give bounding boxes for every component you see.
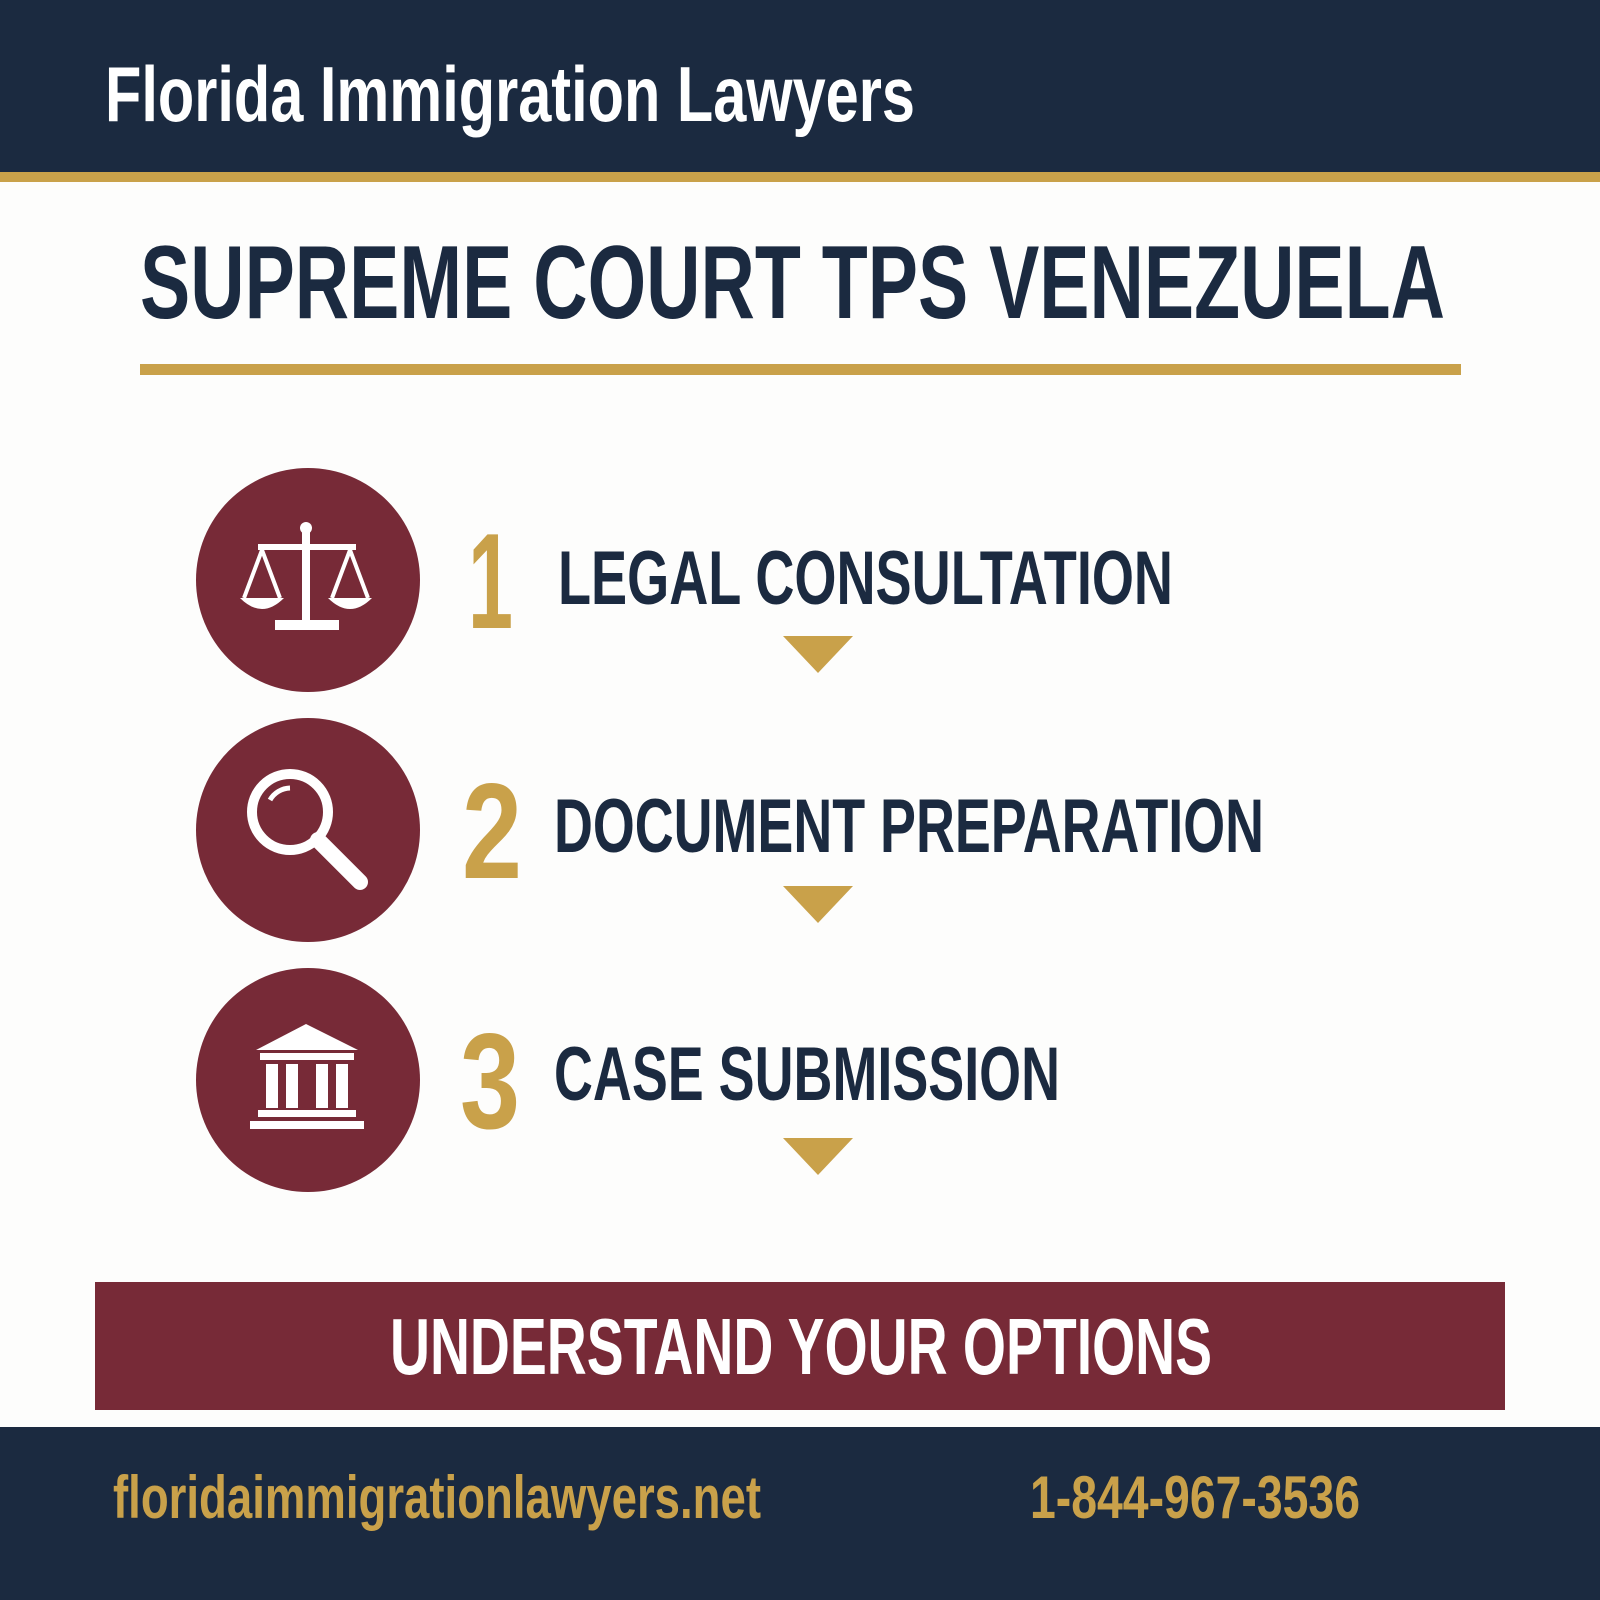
arrow: [783, 886, 853, 923]
icon: scales of justice: [196, 468, 420, 692]
label: legal consultation: LEGAL CONSULTATION: [558, 536, 1173, 621]
banner: understand your options: [95, 1282, 1505, 1410]
title underline: [140, 364, 1461, 375]
number 3: 3: [460, 1005, 520, 1157]
step 2: [196, 718, 1264, 942]
header bar: [0, 0, 1600, 182]
step 1: [196, 468, 1173, 692]
header title: Florida Immigration Lawyers: [105, 50, 915, 138]
phone: 1-844-967-3536: [1030, 1464, 1360, 1531]
footer: [0, 1427, 1600, 1600]
number 1: 1: [468, 505, 513, 657]
website: floridaimmigrationlawyers.net: [113, 1464, 761, 1531]
number 2: 2: [462, 755, 522, 907]
label: case submission: CASE SUBMISSION: [554, 1032, 1060, 1117]
step 3: [196, 968, 1060, 1192]
arrow: [783, 1138, 853, 1175]
icon: courthouse: [196, 968, 420, 1192]
banner: understand your options: UNDERSTAND YOUR OPTIONS: [390, 1302, 1212, 1391]
label: document preparation: DOCUMENT PREPARATION: [554, 784, 1264, 869]
icon: magnifying glass: [196, 718, 420, 942]
arrow: [783, 636, 853, 673]
